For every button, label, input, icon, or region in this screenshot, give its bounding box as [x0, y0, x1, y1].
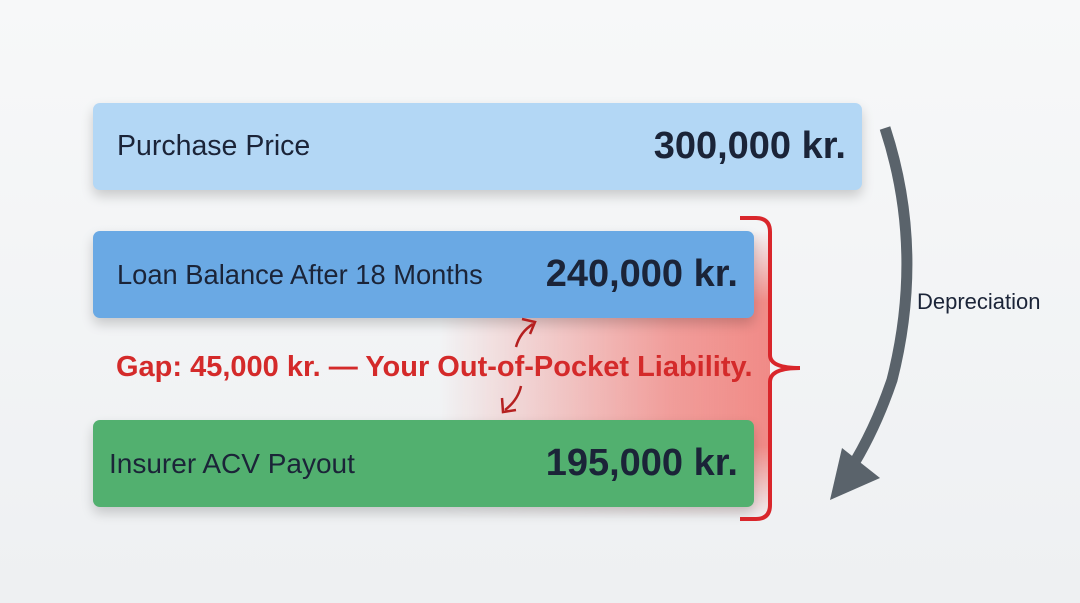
bar: insurer payout: Insurer ACV Payout — [109, 448, 355, 478]
gap text: Gap: 45,000 kr. — Your Out-of-Pocket Liability. — [116, 351, 753, 383]
bar: loan balance: 240,000 kr. — [546, 253, 738, 295]
red gap gradient — [440, 230, 770, 518]
bar: insurer payout: 195,000 kr. — [546, 442, 738, 484]
depreciation arrow — [830, 128, 907, 500]
label depreciation: Depreciation — [917, 289, 1041, 314]
bar: insurer payout — [93, 420, 754, 507]
bar: purchase price — [93, 103, 862, 190]
bar: purchase price: 300,000 kr. — [654, 125, 846, 167]
bar: purchase price: Purchase Price — [117, 130, 310, 162]
bar: loan balance — [93, 231, 754, 318]
small gap arrows — [502, 319, 535, 412]
bracket — [740, 218, 800, 519]
bar: loan balance: Loan Balance After 18 Months — [117, 258, 483, 290]
